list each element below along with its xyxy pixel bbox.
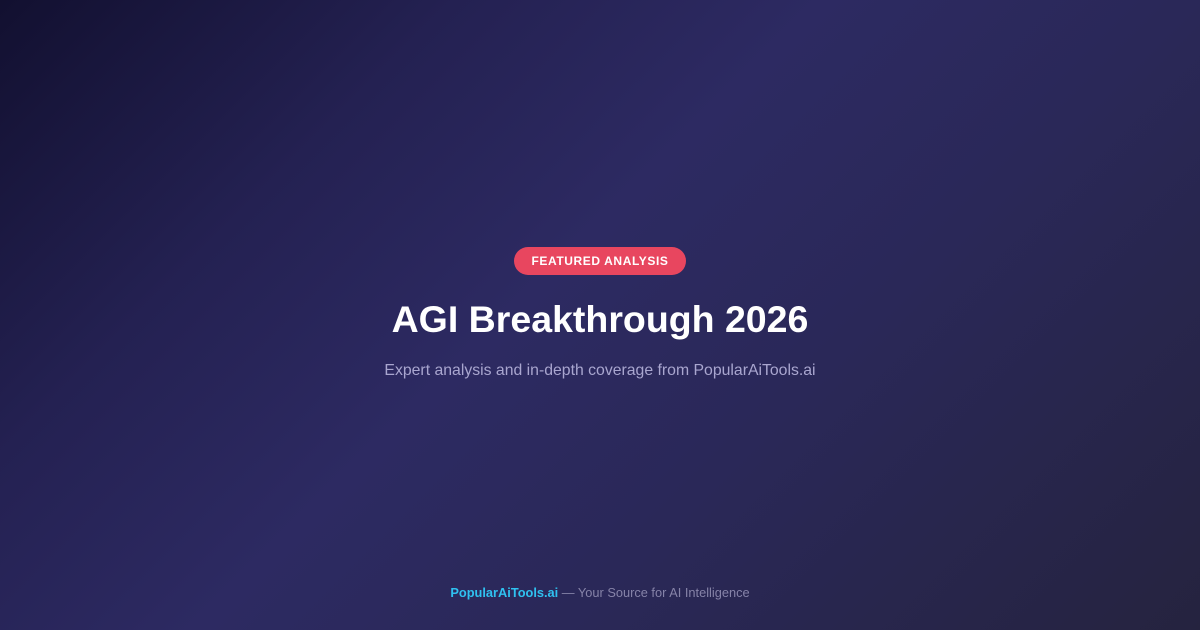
- subtitle: Expert analysis and in-depth coverage from PopularAiTools.ai: [384, 362, 816, 379]
- title: AGI Breakthrough 2026: [392, 298, 808, 340]
- footer tagline: PopularAiTools.ai — Your Source for AI Intelligence: [450, 585, 750, 600]
- badge: featured analysis: FEATURED ANALYSIS: [531, 254, 669, 268]
- badge: featured analysis: [514, 247, 686, 275]
